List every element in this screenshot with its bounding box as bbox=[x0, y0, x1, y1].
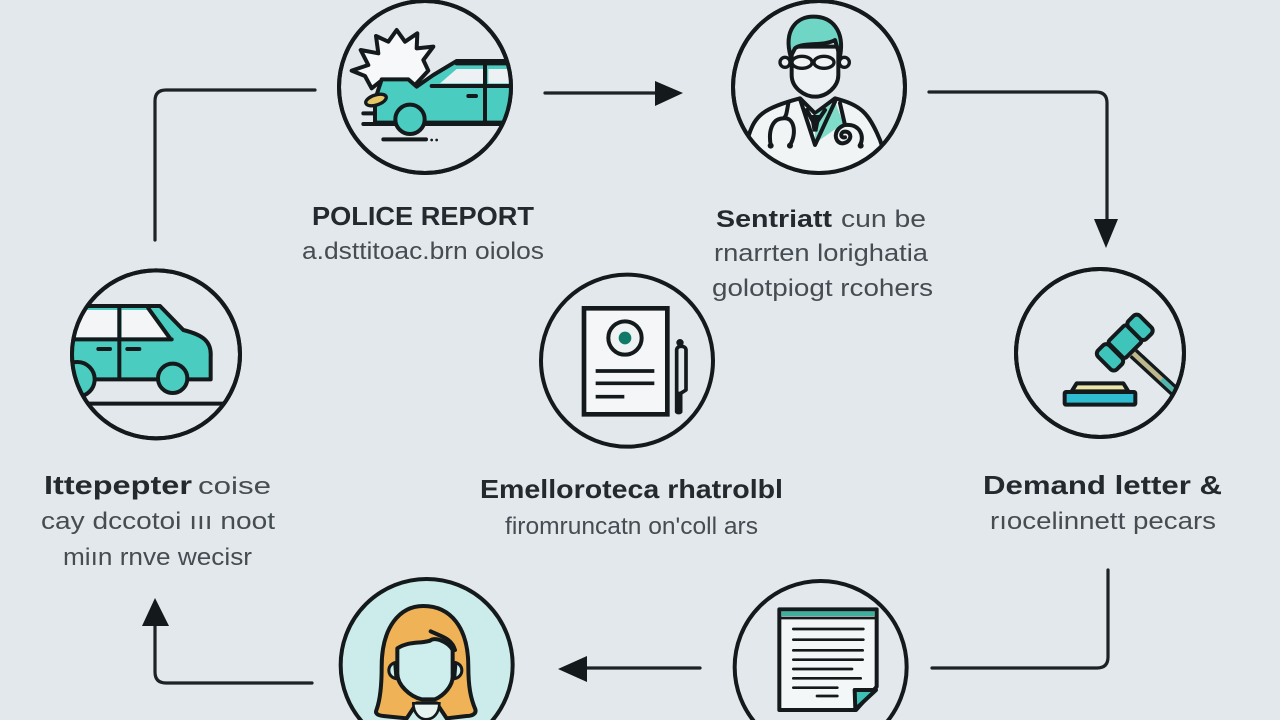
text: doctor description bbox=[712, 206, 933, 302]
text: medical record description: firomruncatn on'coll ars bbox=[505, 513, 758, 540]
text: demand letter description: rıocelinnett pecars bbox=[990, 508, 1216, 535]
icon: document with seal and pen bbox=[541, 275, 713, 447]
text: doctor description: Sentriatt bbox=[716, 206, 832, 233]
arrow: report back up from car to police report bbox=[155, 90, 315, 240]
arrow: document to client bbox=[558, 656, 700, 682]
panel: client bbox=[341, 579, 513, 720]
text: car description bbox=[41, 470, 275, 571]
text: car description: cay dccotoi ııı noot bbox=[41, 508, 275, 535]
arrow: client to car bbox=[142, 598, 312, 683]
icon: gavel bbox=[1016, 269, 1184, 437]
arrow: gavel to settlement document bbox=[932, 570, 1108, 668]
icon: lined document bbox=[735, 581, 907, 720]
text: doctor description: cun be bbox=[841, 206, 926, 233]
panel: medical record bbox=[480, 275, 783, 540]
heading: police report: POLICE REPORT bbox=[312, 201, 534, 231]
text: car description: coise bbox=[198, 473, 271, 500]
icon: woman portrait bbox=[341, 579, 513, 720]
icon: side-view car bbox=[60, 270, 240, 438]
text: car description: miın rnve wecisr bbox=[63, 544, 252, 571]
icon: doctor with stethoscope bbox=[731, 0, 907, 175]
panel: car bbox=[41, 270, 275, 571]
text: doctor description: golotpiogt rcohers bbox=[712, 275, 933, 302]
panel: settlement document bbox=[735, 581, 907, 720]
panel: demand letter bbox=[983, 269, 1222, 535]
heading: demand letter: Demand letter & bbox=[983, 470, 1222, 500]
arrow: doctor to gavel bbox=[929, 92, 1118, 248]
panel: police report bbox=[302, 1, 544, 265]
text: car description: Ittepepter bbox=[44, 470, 192, 500]
panel: doctor bbox=[712, 1, 933, 302]
text: doctor description: rnarrten lorighatia bbox=[714, 240, 929, 267]
icon: crashed car bbox=[339, 1, 517, 173]
heading: medical record: Emelloroteca rhatrolbl bbox=[480, 474, 783, 504]
arrow: police report to doctor bbox=[545, 81, 683, 106]
text: police report description: a.dsttitoac.brn oiolos bbox=[302, 238, 544, 265]
